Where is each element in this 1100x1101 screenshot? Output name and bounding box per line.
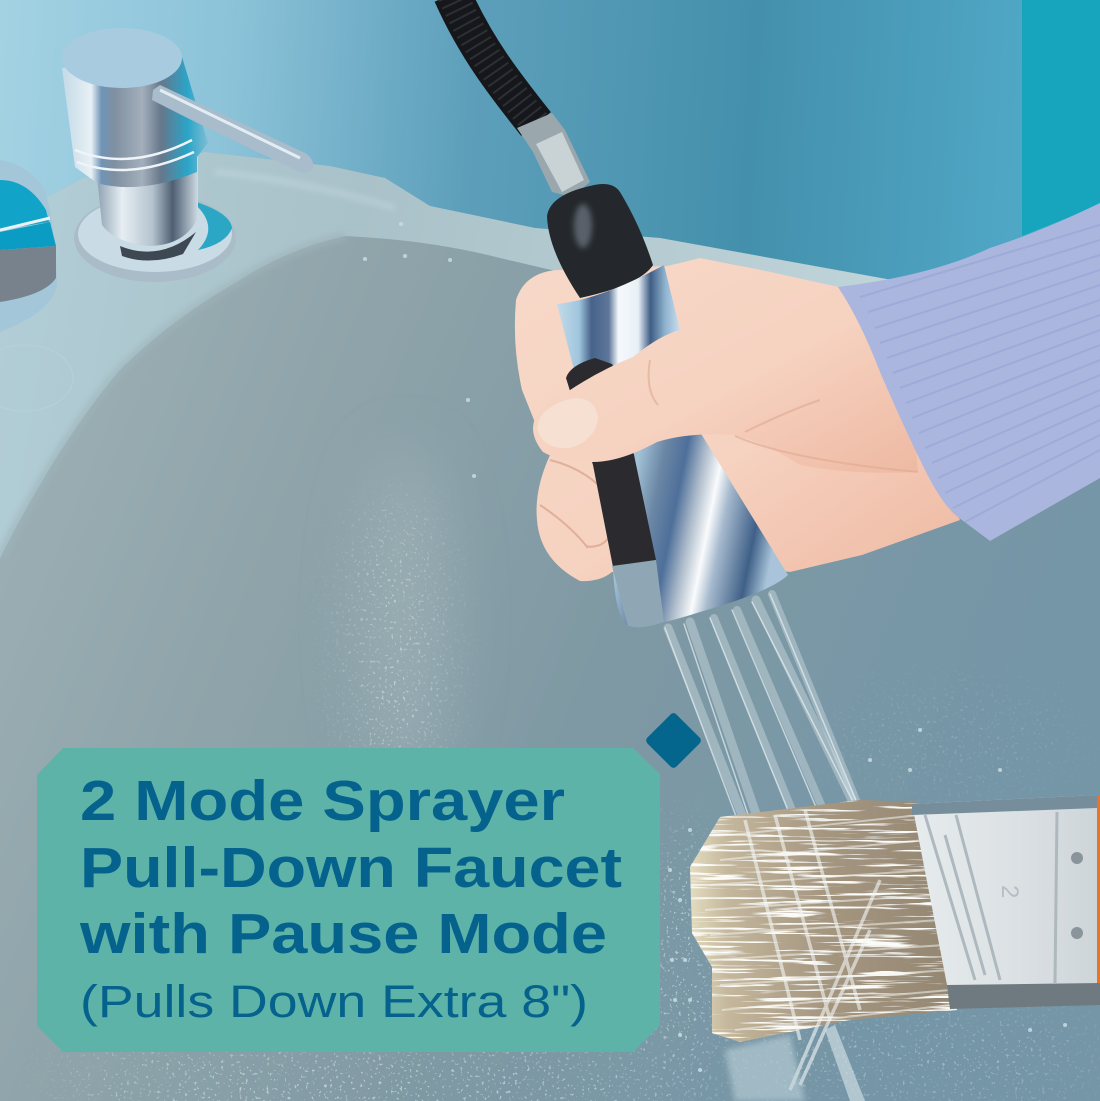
soap dispenser [62, 28, 313, 282]
trigger [566, 358, 656, 567]
headline line 3: with Pause Mode [79, 902, 607, 966]
thumb and palm over sprayer [533, 262, 918, 473]
paint brush [690, 795, 1100, 1090]
finger creases [540, 460, 614, 548]
chrome upper body [557, 265, 680, 385]
dispenser body [62, 57, 208, 187]
thumbnail [537, 398, 598, 448]
sink rim [0, 152, 920, 558]
ferrule stamp: 2 [996, 885, 1023, 898]
back of hand and fingers [515, 258, 960, 581]
lavender sweater cuff [838, 203, 1100, 541]
water droplets [365, 224, 1065, 1070]
water streams behind brush [665, 594, 860, 850]
chrome lower body [613, 432, 788, 627]
metal hose collar [517, 113, 590, 197]
metal ferrule [912, 795, 1097, 985]
sprayer head [547, 184, 788, 627]
orange handle [1092, 795, 1100, 995]
subheading: (Pulls Down Extra 8") [80, 976, 588, 1027]
dispenser cap [62, 28, 182, 88]
water mist speckles [46, 492, 1100, 1101]
left faucet base [0, 160, 57, 332]
callout panel [37, 748, 660, 1052]
diamond accent [645, 712, 702, 769]
splash below brush [725, 1025, 865, 1101]
teal wall panel [1022, 0, 1100, 236]
headline line 2: Pull-Down Faucet [80, 836, 622, 900]
dispenser base plate [74, 194, 236, 282]
black sprayer cap [547, 184, 653, 298]
ferrule rivets [1071, 852, 1083, 864]
headline line 1: 2 Mode Sprayer [80, 769, 565, 833]
dispenser stem [97, 152, 198, 246]
blue wall background [0, 0, 1100, 285]
brush bristles [690, 800, 957, 1042]
knuckle creases [649, 360, 918, 472]
black hose [452, 0, 590, 197]
dispenser lever [152, 85, 313, 173]
lower chrome lip [612, 560, 664, 627]
